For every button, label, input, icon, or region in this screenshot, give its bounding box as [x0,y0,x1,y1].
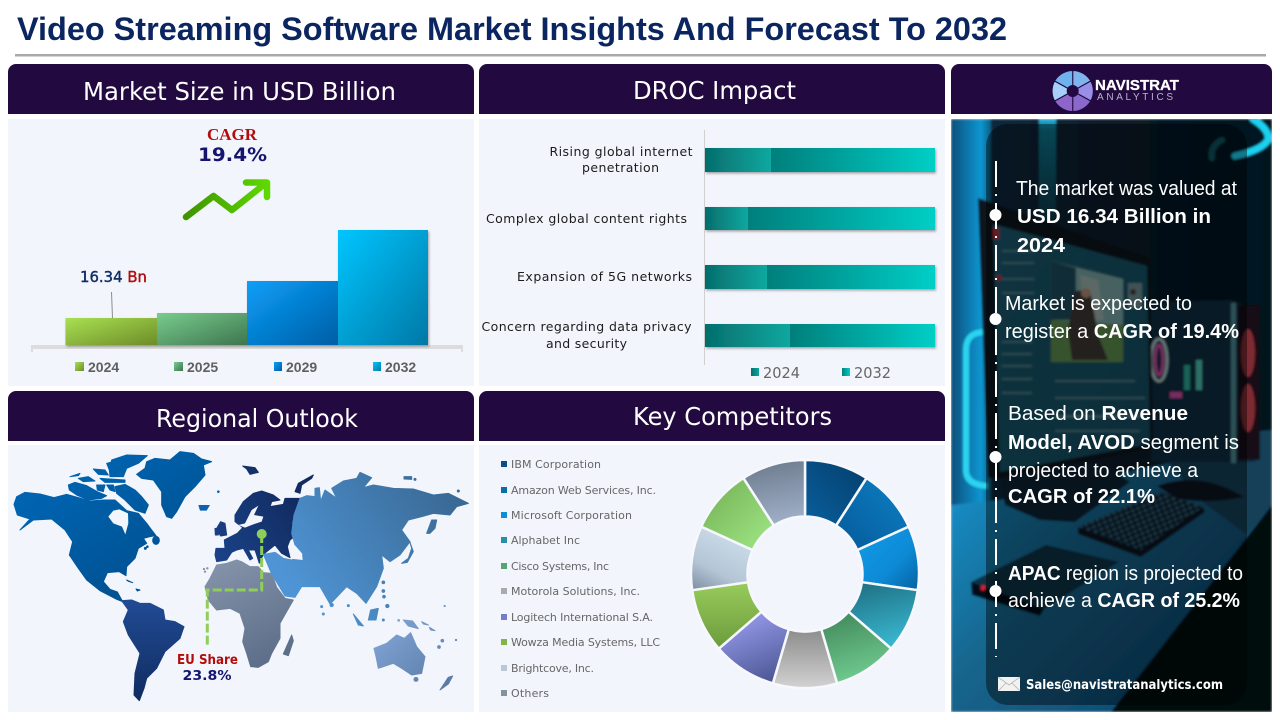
heading: market size [8,64,474,114]
competitor legend: Motorola Solutions, Inc. [511,585,640,598]
tower [1151,300,1255,462]
tablet [971,545,1119,609]
South America [122,600,184,701]
takeaway: CAGR [1005,293,1239,343]
chart legend: 2024 [763,364,800,382]
driver labels: and security [546,336,628,351]
competitor legend: Logitech International S.A. [511,611,653,624]
bar chart: 16.34 Bn [80,268,147,286]
takeaway: APAC [1008,563,1243,612]
takeaway: market value: USD 16.34 Billion in [1017,206,1211,228]
competitor legend: IBM Corporation [511,458,601,471]
competitor legend: Alphabet Inc [511,534,580,547]
heading: key competitors [479,391,945,441]
driver labels: penetration [582,160,659,175]
logo wordmark: ANALYTICS [1097,92,1173,103]
screen video image [1056,264,1125,326]
takeaway: CAGR: Market is expected to [1005,293,1192,315]
desk surface [951,440,1272,712]
chart legend [75,359,416,375]
Baltic Sea cut-out [238,506,263,528]
heading: market size: Market Size in USD Billion [83,77,396,106]
chart legend: 2025 [187,359,218,375]
driver labels: Rising global internet [550,144,693,159]
driver labels: Expansion of 5G networks [517,269,692,284]
chart legend: 2024 [88,359,119,375]
panel: DROC impact [479,64,945,386]
takeaway: AVOD segment: Model, AVOD segment is [1008,432,1239,454]
monitor stand [1003,473,1130,523]
icon: envelope [998,677,1020,691]
keyboard and mouse [1157,480,1244,501]
takeaway: CAGR: register a CAGR of 19.4% [1005,321,1239,343]
heading: DROC impact [479,64,945,114]
panel: market size [8,64,474,386]
competitor legend: Microsoft Corporation [511,509,632,522]
competitor legend: Brightcove, Inc. [511,662,594,675]
takeaway: AVOD segment: CAGR of 22.1% [1008,486,1155,508]
takeaway: AVOD segment: projected to achieve a [1008,460,1199,482]
CAGR callout: 19.4% [198,145,267,166]
competitor legend [501,458,660,700]
contact email: Sales@navistratanalytics.com [1026,677,1223,693]
icon: growth arrow [186,182,267,217]
chart legend: 2032 [854,364,891,382]
driver labels: Complex global content rights [486,211,687,226]
Caspian Sea cut-out [288,545,303,560]
logo header [951,64,1272,114]
chart legend [751,364,891,382]
background photo: streaming desk [951,119,1272,712]
EU share label [177,653,238,684]
translucent overlay [986,124,1247,705]
heading: regional outlook [8,391,474,441]
logo wordmark [1095,77,1179,103]
heading: regional outlook: Regional Outlook [156,404,359,433]
chart legend: 2032 [385,359,416,375]
bar chart [31,230,463,352]
Iceland [198,490,220,511]
CAGR callout: CAGR [207,125,258,144]
CAGR callout [198,125,267,166]
competitor legend: Cisco Systems, Inc [511,560,609,573]
takeaway: market value: The market was valued at [1016,178,1237,200]
timeline [990,161,1002,657]
Europe [215,466,313,563]
chart legend: 2029 [286,359,317,375]
heading: key competitors: Key Competitors [633,402,832,431]
competitor legend: Wowza Media Systems, LLC [511,636,660,649]
Africa [203,560,293,667]
donut chart [691,460,919,688]
takeaway: market value [1016,178,1237,257]
world map [14,452,468,701]
icon: navistrat logo [1052,70,1093,112]
Asia [263,472,468,626]
monitor [978,198,1153,478]
logo wordmark: NAVISTRAT [1095,77,1179,94]
takeaway: APAC: APAC region is projected to [1008,563,1243,585]
takeaway: AVOD segment [1008,403,1239,508]
stacked bar chart [705,148,935,347]
heading: DROC impact: DROC Impact [633,76,796,105]
EU share marker [207,530,265,646]
competitor legend: Amazon Web Services, Inc. [511,484,656,497]
EU share label: 23.8% [182,669,232,684]
panel: key competitors [479,391,945,712]
panel: regional outlook [8,391,474,712]
competitor legend: Others [511,687,549,700]
panel: key takeaways [951,119,1272,712]
EU share label: EU Share [177,653,238,668]
Hudson Bay cut-out [108,509,128,534]
title: Video Streaming Software Market Insights And Forecast To 2032 [17,11,1007,47]
takeaway: APAC: achieve a CAGR of 25.2% [1008,590,1240,612]
driver labels: Concern regarding data privacy [482,319,692,334]
takeaway: market value: 2024 [1017,235,1066,257]
driver labels [482,144,693,351]
takeaway: AVOD segment: Based on Revenue [1008,403,1188,425]
North America [14,452,212,602]
Australia and Oceania [374,605,457,690]
